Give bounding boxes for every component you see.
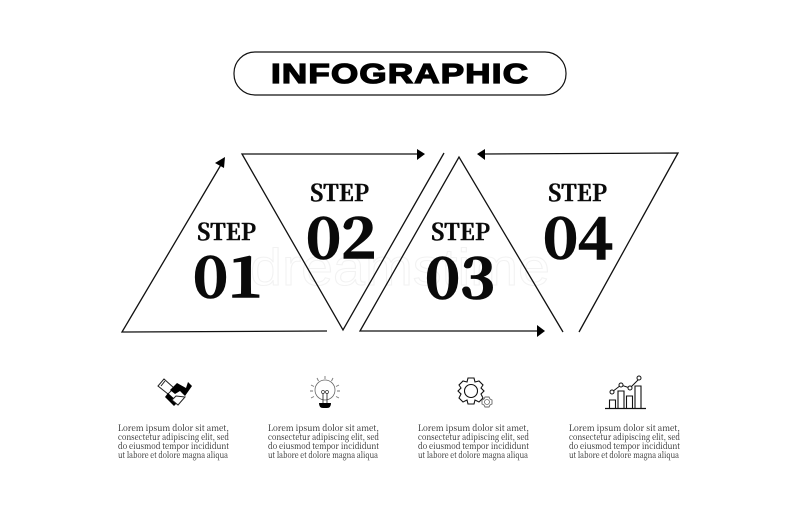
step 4 label: STEP [548,175,607,208]
caption 1: Lorem ipsum dolor sit amet, [118,421,229,434]
caption 2: ut labore et dolore magna aliqua [268,448,378,461]
title pill [234,52,566,95]
caption 3 [418,421,530,461]
icon: handshake [158,379,192,406]
step 2 label: 02 [306,195,376,275]
caption 4: consectetur adipiscing elit, sed [569,430,680,443]
step 3 label: 03 [425,235,495,315]
caption 1 [118,421,230,461]
caption 2: do eiusmod tempor incididunt [268,439,380,452]
step 4 label: 04 [543,195,613,275]
icon: light bulb [310,376,340,408]
step 3 label: STEP [431,214,490,247]
caption 3: consectetur adipiscing elit, sed [418,430,529,443]
caption 1: ut labore et dolore magna aliqua [118,448,228,461]
step 2 triangle arrow [242,149,444,330]
icon: bar chart [605,376,646,408]
caption 1: do eiusmod tempor incididunt [118,439,230,452]
caption 1: consectetur adipiscing elit, sed [118,430,229,443]
icon: gears [458,378,492,407]
step 3 triangle arrow [360,157,563,337]
caption 4: do eiusmod tempor incididunt [569,439,681,452]
caption 3: ut labore et dolore magna aliqua [418,448,528,461]
step 1 triangle arrow [122,157,327,332]
step 1 label: 01 [193,234,263,314]
title: INFOGRAPHIC [271,57,528,89]
caption 2: Lorem ipsum dolor sit amet, [268,421,379,434]
step 1 label: STEP [197,214,256,247]
step 4 triangle arrow [477,149,678,332]
caption 3: Lorem ipsum dolor sit amet, [418,421,529,434]
watermark: dreamstime [250,239,550,297]
caption 3: do eiusmod tempor incididunt [418,439,530,452]
caption 2: consectetur adipiscing elit, sed [268,430,379,443]
caption 4: Lorem ipsum dolor sit amet, [569,421,680,434]
caption 4: ut labore et dolore magna aliqua [569,448,679,461]
caption 4 [569,421,681,461]
caption 2 [268,421,380,461]
step 2 label: STEP [310,175,369,208]
